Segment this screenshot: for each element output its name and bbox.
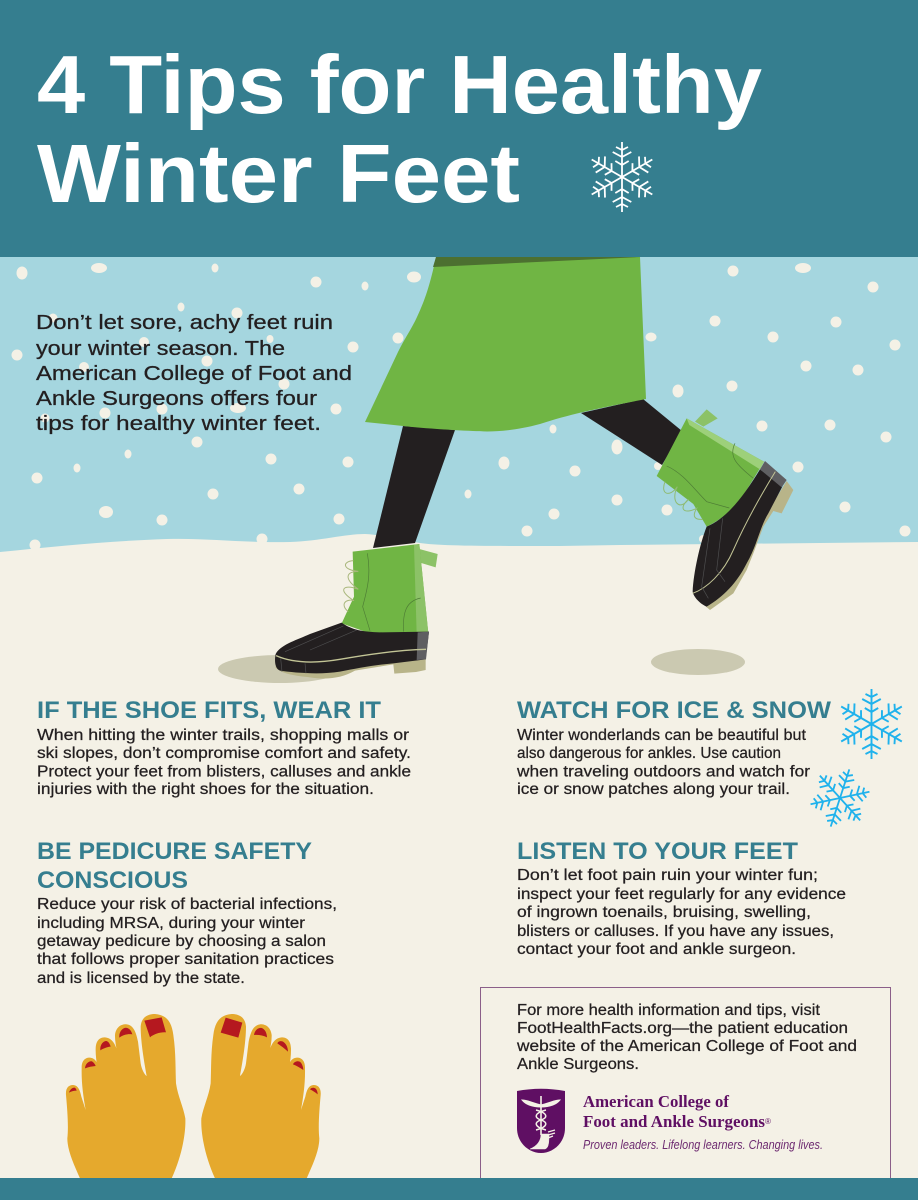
tip: watch for ice and snow [516,697,831,798]
back boot sole [706,481,793,610]
body: ice or snow patches along your trail. [517,781,790,798]
footer band [0,1178,918,1200]
heading: LISTEN TO YOUR FEET [517,838,798,865]
back shoe shadow [651,649,745,675]
body: contact your foot and ankle surgeon. [517,941,796,958]
intro text: your winter season. The [36,338,285,360]
body [517,867,846,958]
tip: pedicure safety [37,838,337,987]
callout text: For more health information and tips, visit [517,1002,821,1019]
body: inspect your feet regularly for any evidence [517,886,846,903]
front boot heel band [417,632,429,660]
icon: white snowflake in header [587,142,657,212]
right foot [201,1014,321,1178]
intro text: tips for healthy winter feet. [36,413,321,435]
body: Winter wonderlands can be beautiful but [517,727,807,744]
heading: IF THE SHOE FITS, WEAR IT [37,697,381,724]
skirt [365,257,646,431]
logo name: Foot and Ankle Surgeons [583,1112,766,1131]
heading: WATCH FOR ICE & SNOW [517,697,831,724]
title [37,38,762,220]
front boot stitching [276,649,426,662]
back boot light strip [687,418,764,469]
callout text [516,1002,857,1073]
body: Protect your feet from blisters, calluses and ankle [37,764,411,780]
back leg [581,399,682,465]
front boot upper [342,544,428,633]
front boot [275,544,438,679]
front boot sole [275,658,426,679]
title: 4 Tips for Healthy [37,38,762,131]
illustration: walking figure [218,257,793,683]
box outline [480,988,890,1178]
back boot heel band [760,461,787,487]
toenails [69,1017,318,1094]
body: When hitting the winter trails, shopping malls or [37,727,409,744]
callout text: FootHealthFacts.org—the patient education [517,1020,848,1037]
back boot upper [657,418,764,527]
heading: CONSCIOUS [37,867,188,894]
header band [0,0,918,257]
body [37,727,411,798]
body: Reduce your risk of bacterial infections, [37,896,337,913]
left foot [66,1014,185,1178]
body: getaway pedicure by choosing a salon [37,933,326,950]
intro text: Ankle Surgeons offers four [36,388,317,410]
intro text: American College of Foot and [36,363,352,385]
back boot rubber shoe [693,469,782,607]
body: when traveling outdoors and watch for [516,764,810,780]
front boot rubber shoe [275,623,429,673]
snowy ground [0,534,918,1200]
icon: small blue snowflake [802,760,878,836]
falling snow dots [12,263,910,550]
title: Winter Feet [37,127,520,220]
body: blisters or calluses. If you have any issues, [517,923,834,940]
body: and is licensed by the state. [37,970,245,987]
back boot stitching [693,472,775,593]
callout box: more information [480,988,890,1178]
front shoe shadow [218,655,342,683]
front boot laces [344,561,358,612]
intro text [36,312,352,435]
logo: American College of Foot and Ankle Surgeons [517,1089,823,1153]
body: including MRSA, during your winter [37,915,305,932]
body [37,896,337,987]
background: winter sky [0,256,918,556]
logo name [583,1092,771,1131]
heading: BE PEDICURE SAFETY [37,838,312,865]
back boot laces [664,482,703,519]
body: of ingrown toenails, bruising, swelling, [517,904,811,921]
body: Don’t let foot pain ruin your winter fun; [517,867,818,884]
logo tagline: Proven leaders. Lifelong learners. Changing lives. [583,1137,823,1152]
callout text: website of the American College of Foot and [516,1038,857,1055]
logo name: American College of [583,1092,730,1111]
logo name: ® [765,1117,771,1126]
back boot [657,409,793,610]
front boot tab [419,549,438,567]
back boot tab [695,409,718,427]
body [516,727,810,798]
heading [37,838,312,894]
illustration: bare feet with red nails [66,1014,321,1178]
tip: if the shoe fits [37,697,411,798]
front boot light strip [414,544,428,633]
body: injuries with the right shoes for the situation. [37,781,374,798]
body: also dangerous for ankles. Use caution [517,745,781,762]
callout text: Ankle Surgeons. [517,1056,639,1073]
logo caduceus [522,1096,560,1149]
tip: listen to your feet [517,838,846,958]
skirt waistband [433,257,640,267]
logo shield [517,1089,565,1153]
icon: large blue snowflake [837,689,906,759]
body: ski slopes, don’t compromise comfort and safety. [37,745,411,762]
body: that follows proper sanitation practices [37,951,334,968]
front leg [373,426,455,548]
intro text: Don’t let sore, achy feet ruin [36,312,333,334]
